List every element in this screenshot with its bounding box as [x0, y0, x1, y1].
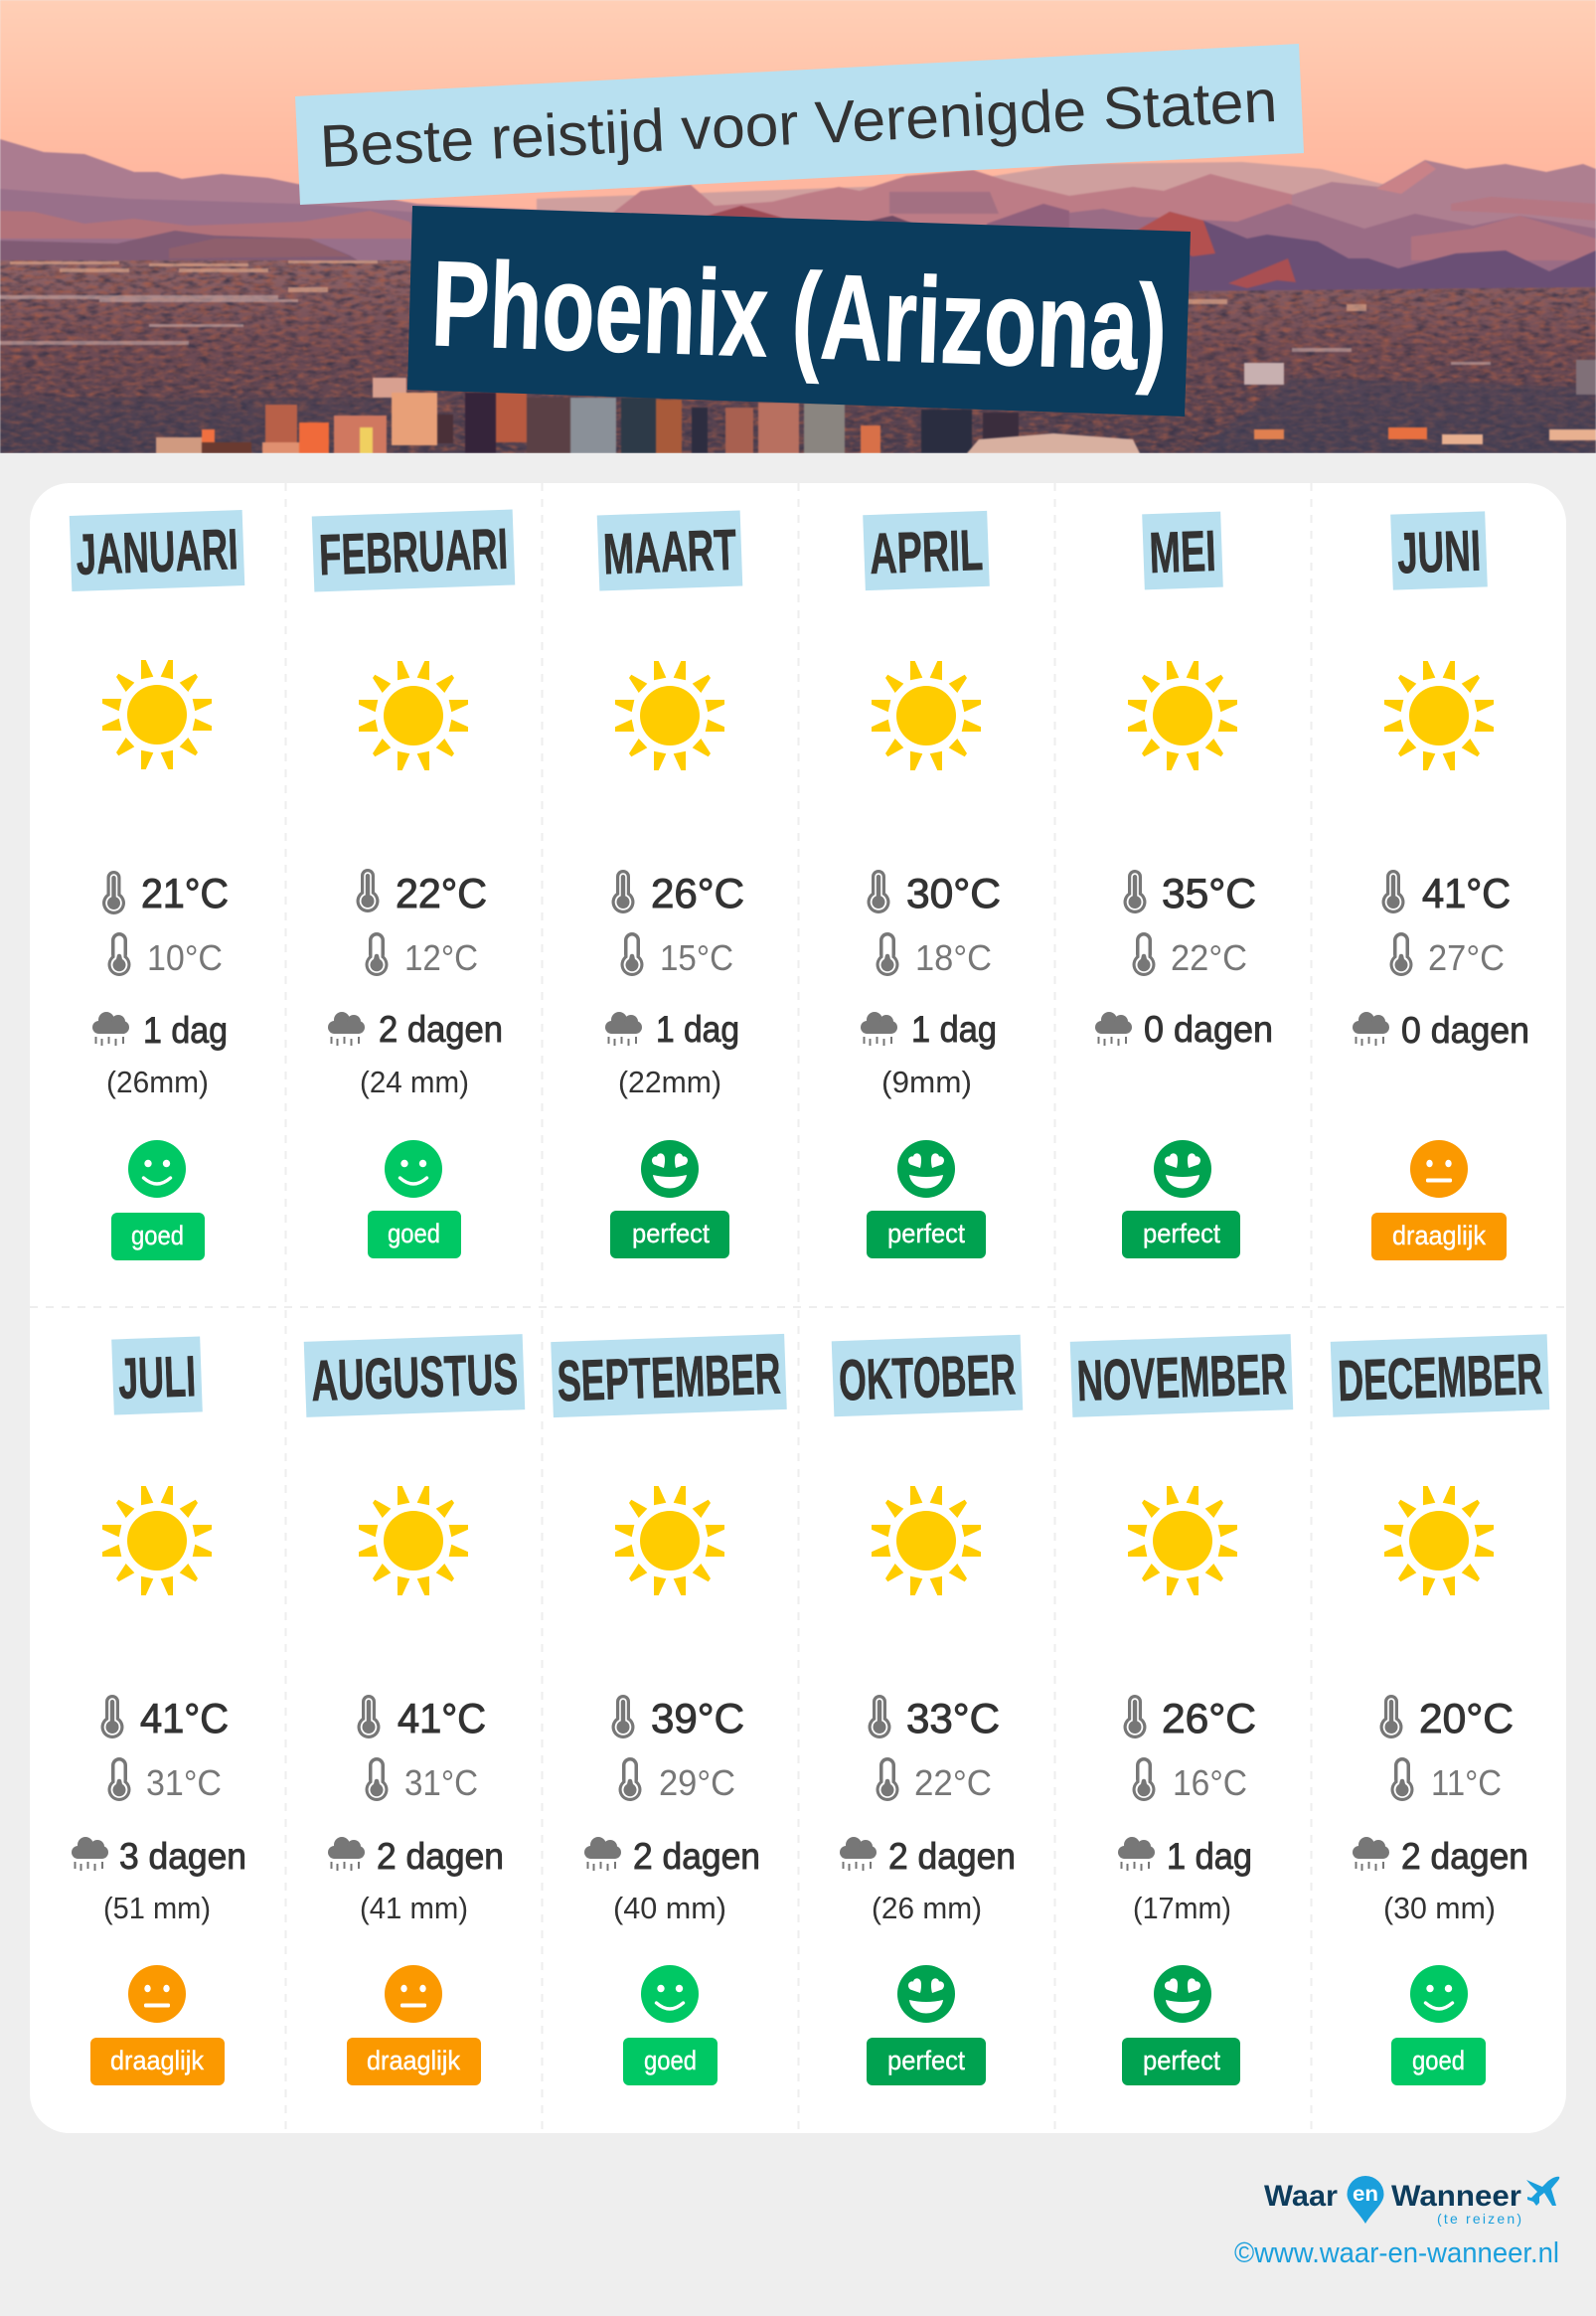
column: januari [70, 510, 244, 1260]
low temperature [620, 932, 733, 978]
month heading: september [551, 1334, 787, 1417]
rain days [605, 1009, 739, 1050]
column: maart [597, 511, 744, 1258]
rainfall amount: (51 mm) [103, 1891, 211, 1925]
icon: sun [359, 1486, 468, 1595]
rating label: draaglijk [110, 2046, 204, 2075]
high temperature: 33°C [906, 1695, 1000, 1741]
rain days [861, 1009, 997, 1050]
rain days: 1 dag [1167, 1836, 1252, 1877]
icon: sun [1384, 1486, 1494, 1595]
high temperature [1379, 1695, 1514, 1741]
month heading: januari [70, 510, 244, 591]
rating label: perfect [632, 1219, 710, 1248]
rainfall amount: (26 mm) [872, 1891, 982, 1925]
month heading: februari: FEBRUARI [318, 517, 509, 587]
rain days: 2 dagen [377, 1836, 504, 1877]
month heading: juli: JULI [117, 1344, 197, 1411]
logo: Waar en Wanneer: Waar [1264, 2180, 1338, 2213]
rainfall amount: (40 mm) [613, 1891, 726, 1925]
icon: map pin: en [1353, 2183, 1378, 2206]
column: juli [72, 1336, 246, 2085]
title banner: Phoenix (Arizona) [429, 236, 1169, 396]
column: november [1070, 1334, 1293, 2085]
rating label [368, 1211, 461, 1258]
month heading: november [1070, 1334, 1293, 1417]
rating smiley [128, 1965, 186, 2023]
high temperature [867, 870, 1001, 916]
low temperature [1389, 932, 1505, 978]
rating label: goed [388, 1219, 440, 1248]
rating label [867, 1211, 986, 1258]
rainfall amount: (17mm) [1133, 1891, 1231, 1925]
rating smiley [385, 1140, 442, 1198]
high temperature [1381, 870, 1511, 916]
month heading: maart: MAART [602, 518, 737, 586]
rating label [1371, 1213, 1507, 1260]
rating smiley [1154, 1140, 1211, 1198]
website credit: ©www.waar-en-wanneer.nl [1234, 2237, 1559, 2269]
rating label [111, 1213, 205, 1260]
month heading: maart [597, 511, 742, 590]
rain days [328, 1009, 503, 1050]
rating label [347, 2038, 481, 2085]
low temperature: 11°C [1431, 1762, 1502, 1803]
low temperature: 22°C [914, 1762, 992, 1803]
low temperature [877, 932, 992, 978]
month heading: mei [1142, 512, 1223, 589]
low temperature: 10°C [147, 937, 223, 978]
rain days: 3 dagen [119, 1836, 246, 1877]
rating label: goed [1412, 2046, 1465, 2075]
month heading: november: NOVEMBER [1075, 1342, 1288, 1413]
icon: sun [102, 1486, 212, 1595]
rain days: 1 dag [911, 1009, 997, 1050]
logo: Waar en Wanneer: (te reizen) [1437, 2211, 1521, 2227]
header photo: Phoenix skyline with mountains at dusk [0, 0, 1596, 453]
icon: sun [615, 661, 724, 770]
icon: sun [872, 1486, 981, 1595]
high temperature [102, 870, 229, 916]
month heading: oktober [832, 1335, 1023, 1416]
month heading: juni [1390, 511, 1488, 590]
header bottom edge [0, 453, 1596, 459]
rain days: 0 dagen [1401, 1010, 1529, 1051]
rainfall amount: (26mm) [106, 1065, 209, 1099]
icon: sun [102, 660, 212, 769]
rain days [92, 1010, 228, 1051]
rating label [1391, 2038, 1486, 2085]
high temperature: 35°C [1162, 870, 1256, 916]
high temperature [101, 1695, 229, 1741]
high temperature [358, 1695, 486, 1741]
icon: map pin [1348, 2176, 1383, 2224]
high temperature: 26°C [651, 870, 744, 916]
icon: sun [872, 661, 981, 770]
month heading: mei: MEI [1148, 519, 1217, 585]
subtitle banner [295, 44, 1304, 205]
panel: climate table card [30, 483, 1566, 2133]
low temperature [366, 1757, 478, 1803]
column: mei [1095, 512, 1273, 1258]
high temperature: 22°C [396, 870, 487, 916]
month heading: februari [312, 509, 515, 592]
month heading: juli [111, 1336, 203, 1415]
icon: sun [615, 1486, 724, 1595]
low temperature [107, 1757, 222, 1803]
low temperature [877, 1757, 992, 1803]
low temperature: 12°C [404, 937, 478, 978]
rainfall amount: (30 mm) [1383, 1891, 1496, 1925]
rating smiley [897, 1965, 955, 2023]
month heading: augustus: AUGUSTUS [310, 1342, 519, 1413]
rain days: 1 dag [143, 1010, 228, 1051]
low temperature [1133, 932, 1247, 978]
rating smiley [1154, 1965, 1211, 2023]
month heading: augustus [304, 1334, 525, 1417]
low temperature [618, 1757, 735, 1803]
column: oktober [832, 1335, 1023, 2085]
rain days: 0 dagen [1144, 1009, 1273, 1050]
month heading: juni: JUNI [1396, 519, 1482, 585]
high temperature: 21°C [141, 870, 229, 916]
high temperature: 26°C [1162, 1695, 1256, 1741]
rating smiley [641, 1140, 699, 1198]
rainfall amount: (24 mm) [360, 1065, 469, 1099]
high temperature: 20°C [1419, 1695, 1514, 1741]
high temperature: 39°C [651, 1695, 744, 1741]
rainfall amount: (22mm) [618, 1065, 721, 1099]
low temperature: 31°C [146, 1762, 222, 1803]
low temperature [1133, 1757, 1247, 1803]
high temperature: 30°C [906, 870, 1001, 916]
month heading: september: SEPTEMBER [557, 1342, 782, 1413]
column: juni [1353, 511, 1529, 1260]
icon: sun [359, 661, 468, 770]
rating smiley [897, 1140, 955, 1198]
rating smiley [128, 1140, 186, 1198]
rating label: goed [131, 1221, 184, 1250]
month heading: oktober: OKTOBER [838, 1342, 1017, 1413]
rating label [867, 2038, 986, 2085]
low temperature [107, 932, 223, 978]
rating label: draaglijk [1392, 1221, 1486, 1250]
month heading: januari: JANUARI [75, 517, 239, 587]
month heading: april: APRIL [869, 518, 984, 586]
rainfall amount: (41 mm) [360, 1891, 468, 1925]
low temperature: 16°C [1173, 1762, 1247, 1803]
rating label [610, 1211, 729, 1258]
low temperature: 27°C [1428, 937, 1505, 978]
rain days: 1 dag [656, 1009, 739, 1050]
rain days [1118, 1836, 1252, 1877]
logo: Waar en Wanneer: Wanneer [1391, 2180, 1521, 2213]
rainfall amount: (9mm) [881, 1065, 972, 1099]
icon: airplane [1526, 2177, 1559, 2206]
rain days: 2 dagen [888, 1836, 1016, 1877]
high temperature: 41°C [140, 1695, 229, 1741]
column: december [1331, 1334, 1549, 2085]
rating label: perfect [1143, 2046, 1220, 2075]
high temperature: 41°C [1422, 870, 1511, 916]
rating label: perfect [1143, 1219, 1220, 1248]
rating smiley [385, 1965, 442, 2023]
icon: sun [1128, 661, 1237, 770]
low temperature [366, 932, 478, 978]
icon: sun [1128, 1486, 1237, 1595]
high temperature: 41°C [398, 1695, 486, 1741]
month heading: april [863, 511, 990, 590]
low temperature [1391, 1757, 1502, 1803]
rating label [623, 2038, 718, 2085]
title banner [407, 206, 1191, 416]
low temperature: 22°C [1171, 937, 1247, 978]
rating smiley [1410, 1965, 1468, 2023]
rain days: 2 dagen [633, 1836, 760, 1877]
column: april [861, 511, 1001, 1258]
rating label: perfect [887, 2046, 965, 2075]
rain days: 2 dagen [379, 1009, 503, 1050]
icon: sun [1384, 661, 1494, 770]
rating label: goed [644, 2046, 697, 2075]
subtitle banner: Beste reistijd voor Verenigde Staten [318, 68, 1279, 180]
rating smiley [1410, 1140, 1468, 1198]
low temperature: 31°C [404, 1762, 478, 1803]
high temperature [356, 869, 487, 916]
rating label [1122, 2038, 1240, 2085]
logo: Waar en Wanneer [1264, 2176, 1559, 2227]
rating label: draaglijk [367, 2046, 460, 2075]
low temperature: 15°C [660, 937, 733, 978]
low temperature: 29°C [659, 1762, 735, 1803]
column: augustus [304, 1334, 525, 2085]
rating label [1122, 1211, 1240, 1258]
rating smiley [641, 1965, 699, 2023]
rain days: 2 dagen [1401, 1836, 1528, 1877]
rating label [90, 2038, 225, 2085]
column: september [551, 1334, 787, 2085]
rating label: perfect [887, 1219, 965, 1248]
column: februari [312, 509, 515, 1258]
low temperature: 18°C [915, 937, 992, 978]
